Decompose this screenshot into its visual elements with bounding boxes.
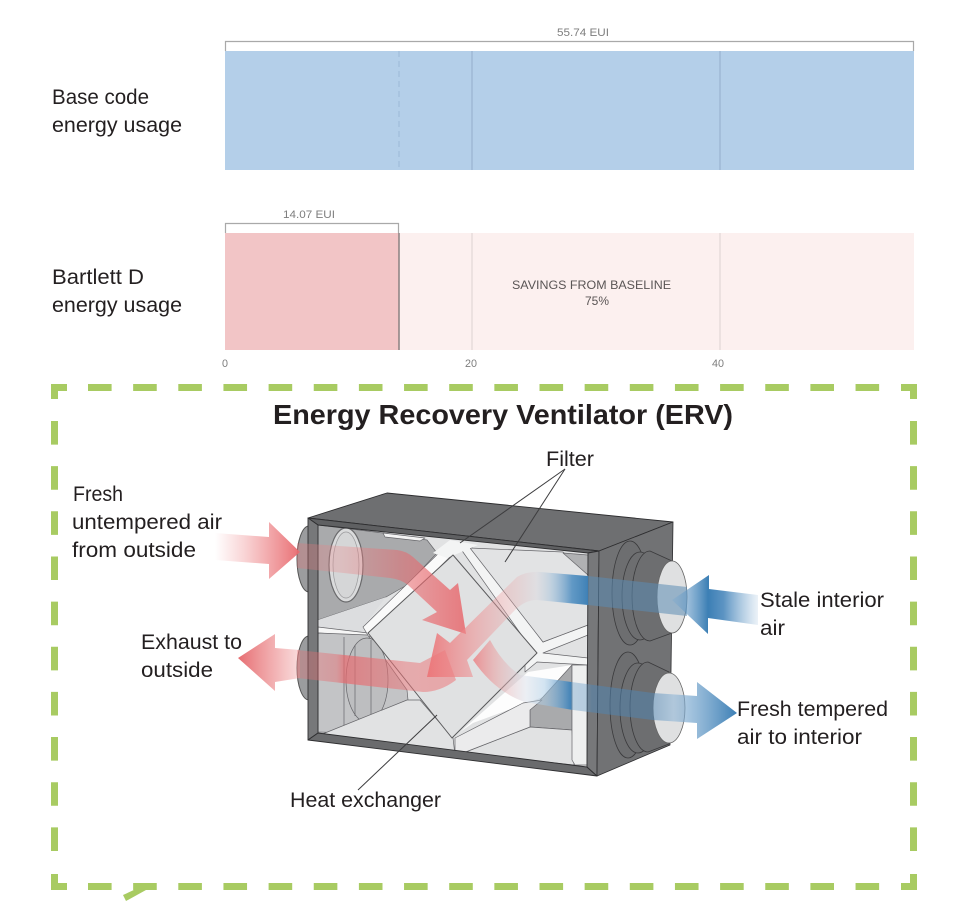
right duct ports [610, 541, 687, 758]
title: Energy Recovery Ventilator (ERV) [273, 399, 733, 430]
label: Base code energy usage: Base code [52, 86, 149, 109]
label: exhaust [141, 631, 242, 682]
heat exchanger [368, 555, 537, 738]
outer casing [308, 493, 673, 776]
label: Bartlett D energy usage: energy usage [52, 294, 182, 317]
label: exhaust: Exhaust to [141, 631, 242, 654]
right upper filter [458, 545, 588, 672]
bar chart: Bartlett D: SAVINGS FROM BASELINE [512, 280, 671, 292]
chart axis labels: 40 [712, 358, 724, 370]
chart axis labels: 0 [222, 358, 228, 370]
chart axis labels [222, 358, 724, 370]
bar chart: base code: 55.74 EUI [557, 27, 609, 39]
bar chart: Bartlett D: 75% [585, 296, 609, 308]
label: Base code energy usage: energy usage [52, 114, 182, 137]
label: fresh tempered air: air to interior [737, 726, 862, 749]
dashed green panel border [54, 388, 914, 901]
label: fresh untempered air: from outside [72, 539, 196, 562]
leader lines: filter [460, 469, 565, 562]
label: fresh tempered air [737, 698, 888, 749]
label: filter: Filter [546, 448, 594, 471]
label: stale interior air: air [760, 617, 785, 640]
label: fresh untempered air: untempered air [72, 511, 222, 534]
label: heat exchanger: Heat exchanger [290, 789, 441, 812]
arrow: stale interior air [427, 572, 758, 677]
label: Bartlett D energy usage: Bartlett D [52, 266, 144, 289]
interior chambers [318, 525, 588, 767]
bar chart: base code [225, 27, 914, 170]
left duct ports [297, 526, 321, 700]
label: exhaust: outside [141, 659, 213, 682]
chart axis labels: 20 [465, 358, 477, 370]
label: fresh untempered air: Fresh [73, 483, 123, 506]
label: stale interior air [760, 589, 884, 640]
ERV unit diagram [297, 493, 687, 776]
right lower chamber [460, 665, 572, 732]
bar chart: Bartlett D: 14.07 EUI [283, 209, 335, 221]
filter strip white [363, 545, 458, 637]
arrow: fresh untempered air in [215, 522, 466, 634]
bar chart: Bartlett D [225, 209, 914, 350]
leader line: heat exchanger [358, 715, 437, 790]
arrow: exhaust to outside [238, 634, 456, 692]
label: fresh untempered air [72, 483, 222, 562]
label: fresh tempered air: Fresh tempered [737, 698, 888, 721]
label: Bartlett D energy usage [52, 266, 182, 317]
label: Base code energy usage [52, 86, 182, 137]
label: stale interior air: Stale interior [760, 589, 884, 612]
arrow: fresh tempered air to interior [473, 640, 737, 739]
